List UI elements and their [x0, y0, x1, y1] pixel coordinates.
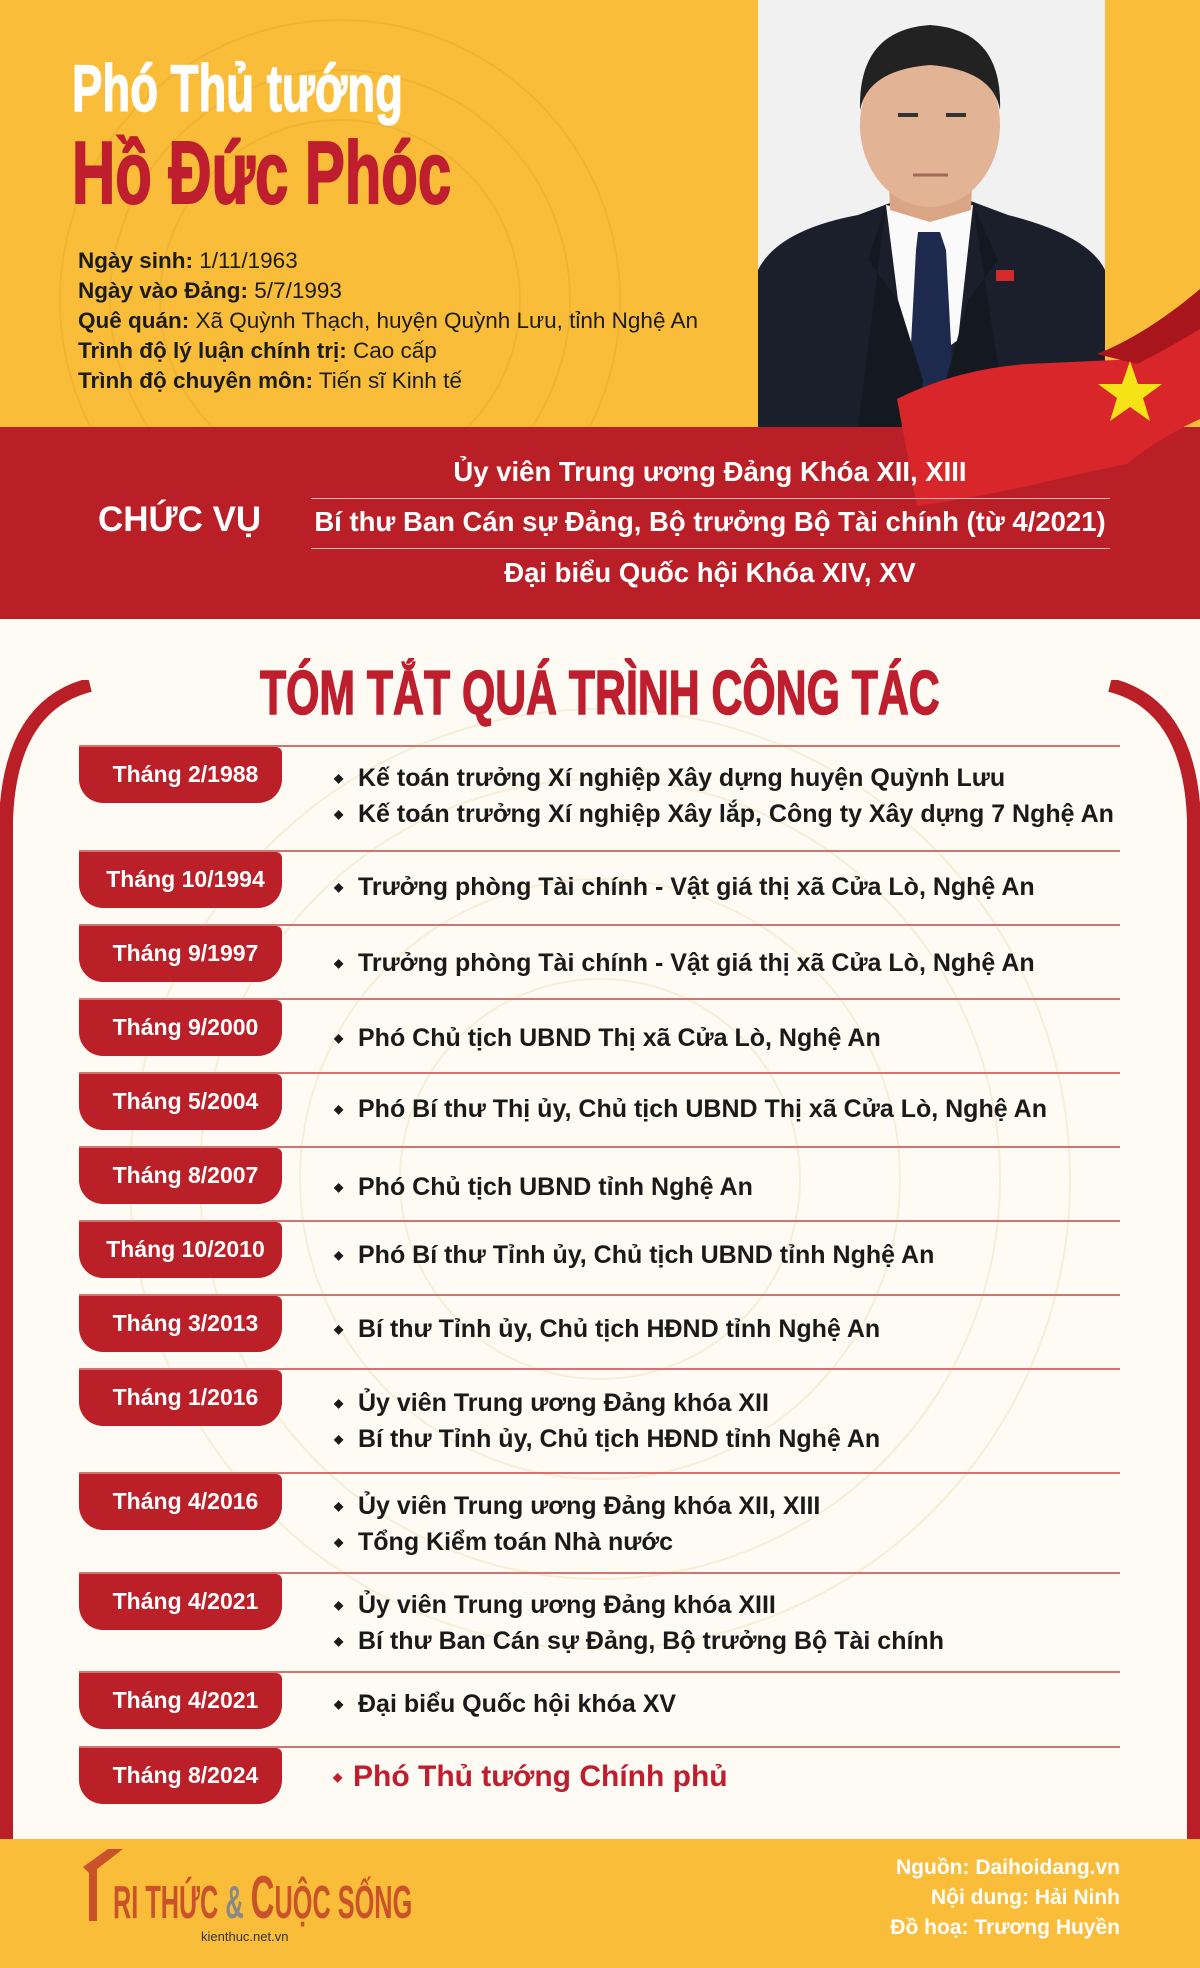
- label: CHỨC VỤ: CHỨC VỤ: [98, 500, 261, 539]
- timeline: Tháng 4/2021: [113, 1588, 258, 1614]
- red curved frame: [0, 680, 1200, 1839]
- credits: Nguồn: Daihoidang.vn: [896, 1856, 1120, 1879]
- timeline: ◆: [334, 1634, 343, 1648]
- personal info: Quê quán: Xã Quỳnh Thạch, huyện Quỳnh Lưu, tỉnh Nghệ An: [78, 308, 698, 333]
- credits: [890, 1856, 1120, 1939]
- timeline: Tháng 3/2013: [113, 1310, 258, 1336]
- row 4/2016: [79, 1472, 1120, 1474]
- timeline: ◆: [334, 1499, 343, 1513]
- positions list: [311, 456, 1110, 588]
- timeline: Ủy viên Trung ương Đảng khóa XII: [358, 1389, 769, 1417]
- timeline: ◆: [334, 1598, 343, 1612]
- timeline: Tháng 4/2016: [113, 1488, 258, 1514]
- timeline: Tháng 9/2000: [113, 1014, 258, 1040]
- timeline: Tổng Kiểm toán Nhà nước: [358, 1528, 673, 1556]
- positions list: Đại biểu Quốc hội Khóa XIV, XV: [504, 557, 916, 588]
- timeline: Tháng 8/2007: [113, 1162, 258, 1188]
- row 5/2004: [79, 1072, 1120, 1074]
- personal info: [78, 248, 698, 393]
- timeline: ◆: [334, 1031, 343, 1045]
- timeline: ◆: [334, 1322, 343, 1336]
- timeline: Trưởng phòng Tài chính - Vật giá thị xã Cửa Lò, Nghệ An: [358, 949, 1035, 977]
- timeline: Ủy viên Trung ương Đảng khóa XIII: [358, 1591, 776, 1619]
- timeline: ◆: [334, 956, 343, 970]
- timeline: [79, 745, 1120, 1804]
- timeline: Tháng 5/2004: [113, 1088, 258, 1114]
- timeline: ◆: [334, 1697, 343, 1711]
- row 10/1994: [79, 850, 1120, 852]
- logo: RI THỨC & CUỘC SỐNG: [113, 1864, 412, 1931]
- personal info: Trình độ chuyên môn: Tiến sĩ Kinh tế: [78, 368, 462, 393]
- timeline: Tháng 2/1988: [113, 761, 258, 787]
- title: Phó Thủ tướng: Phó Thủ tướng: [72, 51, 403, 125]
- positions list: Ủy viên Trung ương Đảng Khóa XII, XIII: [453, 456, 967, 487]
- row 10/2010: [79, 1220, 1120, 1222]
- header yellow background: [0, 0, 1200, 427]
- row 9/1997: [79, 924, 1120, 926]
- timeline: Trưởng phòng Tài chính - Vật giá thị xã Cửa Lò, Nghệ An: [358, 873, 1035, 901]
- timeline: ◆: [334, 807, 343, 821]
- flag: [897, 289, 1200, 506]
- timeline: ◆: [334, 1535, 343, 1549]
- timeline: Bí thư Ban Cán sự Đảng, Bộ trưởng Bộ Tài chính: [358, 1627, 944, 1655]
- logo: kienthuc.net.vn: [201, 1929, 288, 1944]
- credits: Đồ hoạ: Trương Huyền: [890, 1916, 1120, 1939]
- personal info: Ngày sinh: 1/11/1963: [78, 248, 298, 273]
- timeline: Phó Chủ tịch UBND tỉnh Nghệ An: [358, 1173, 753, 1201]
- timeline: ◆: [334, 1248, 343, 1262]
- personal info: Ngày vào Đảng: 5/7/1993: [78, 278, 342, 303]
- timeline: Bí thư Tỉnh ủy, Chủ tịch HĐND tỉnh Nghệ An: [358, 1315, 880, 1343]
- timeline: Tháng 8/2024: [113, 1762, 258, 1788]
- logo: [83, 1849, 412, 1944]
- timeline: ◆: [334, 880, 343, 894]
- timeline: Kế toán trưởng Xí nghiệp Xây dựng huyện Quỳnh Lưu: [358, 764, 1005, 792]
- timeline: ◆: [333, 1770, 342, 1784]
- timeline: Tháng 4/2021: [113, 1687, 258, 1713]
- background drum pattern: [130, 708, 1071, 1650]
- title: name: Hồ Đức Phóc: [72, 123, 451, 222]
- portrait photo: [758, 0, 1105, 427]
- row 2/1988: [79, 745, 1120, 747]
- timeline: Kế toán trưởng Xí nghiệp Xây lắp, Công ty Xây dựng 7 Nghệ An: [358, 800, 1114, 828]
- row 1/2016: [79, 1368, 1120, 1370]
- row 8/2007: [79, 1146, 1120, 1148]
- timeline: Tháng 1/2016: [113, 1384, 258, 1410]
- timeline: ◆: [334, 771, 343, 785]
- timeline: ◆: [334, 1396, 343, 1410]
- footer: [0, 1839, 1200, 1968]
- row 4/2021 b: [79, 1671, 1120, 1673]
- timeline: Tháng 10/2010: [106, 1236, 265, 1262]
- section title: TÓM TẮT QUÁ TRÌNH CÔNG TÁC: [260, 659, 940, 728]
- row 4/2021 a: [79, 1572, 1120, 1574]
- row 3/2013: [79, 1294, 1120, 1296]
- row 8/2024: [79, 1746, 1120, 1748]
- timeline: Phó Thủ tướng Chính phủ: [353, 1760, 728, 1793]
- credits: Nội dung: Hải Ninh: [931, 1886, 1120, 1909]
- personal info: Trình độ lý luận chính trị: Cao cấp: [78, 338, 437, 363]
- timeline: Ủy viên Trung ương Đảng khóa XII, XIII: [358, 1492, 820, 1520]
- positions list: Bí thư Ban Cán sự Đảng, Bộ trưởng Bộ Tài chính (từ 4/2021): [314, 506, 1106, 537]
- timeline: ◆: [334, 1432, 343, 1446]
- timeline: ◆: [334, 1102, 343, 1116]
- timeline: Tháng 10/1994: [106, 866, 265, 892]
- timeline: ◆: [334, 1180, 343, 1194]
- timeline: Tháng 9/1997: [113, 940, 258, 966]
- timeline: Phó Bí thư Tỉnh ủy, Chủ tịch UBND tỉnh Nghệ An: [358, 1241, 934, 1269]
- row 9/2000: [79, 998, 1120, 1000]
- timeline: Phó Bí thư Thị ủy, Chủ tịch UBND Thị xã Cửa Lò, Nghệ An: [358, 1095, 1047, 1123]
- timeline: Bí thư Tỉnh ủy, Chủ tịch HĐND tỉnh Nghệ An: [358, 1425, 880, 1453]
- red band: chức vụ: [0, 427, 1200, 619]
- timeline: Phó Chủ tịch UBND Thị xã Cửa Lò, Nghệ An: [358, 1024, 881, 1052]
- timeline: Đại biểu Quốc hội khóa XV: [358, 1690, 676, 1718]
